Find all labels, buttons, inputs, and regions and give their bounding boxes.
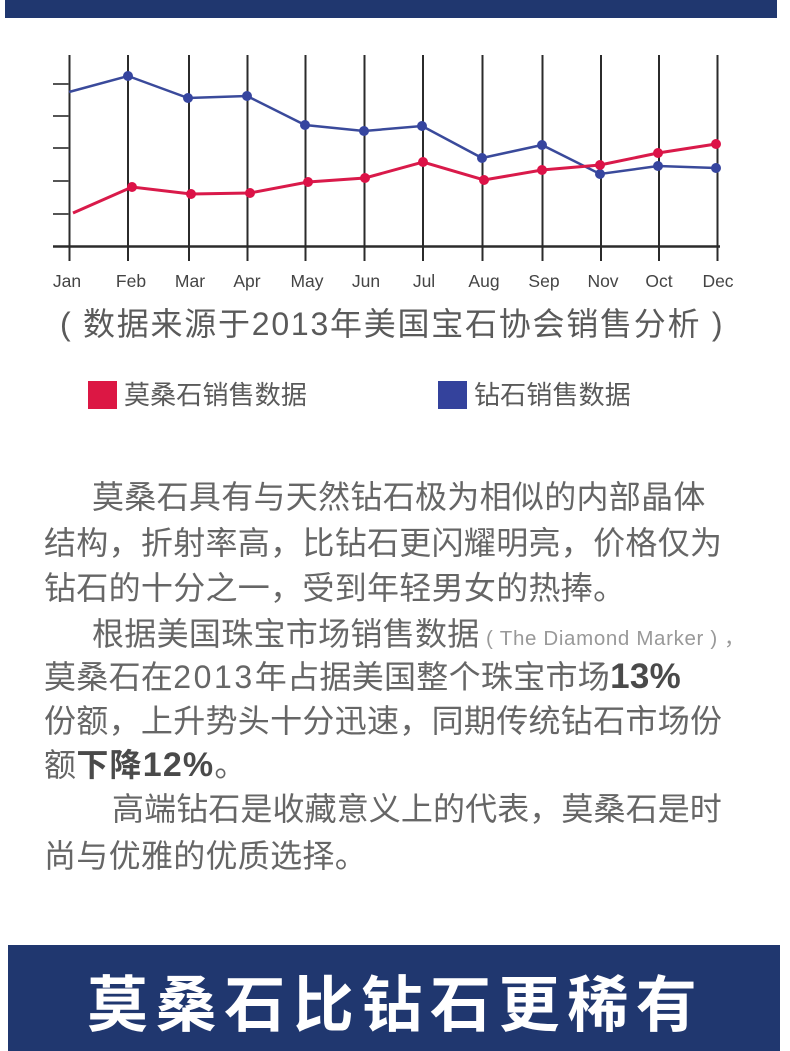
paragraph 1: 结构，折射率高，比钻石更闪耀明亮，价格仅为	[44, 525, 722, 561]
body paragraphs	[44, 479, 745, 874]
diamond sales line	[69, 71, 721, 179]
paragraph 2: 根据美国珠宝市场销售数据 ( The Diamond Marker ) ，	[92, 616, 745, 652]
month labels: May	[290, 271, 324, 291]
month labels	[53, 271, 734, 291]
month labels: Sep	[528, 271, 560, 291]
paragraph 2: 份额，上升势头十分迅速，同期传统钻石市场份	[44, 703, 722, 739]
chart axes and grid	[53, 55, 720, 261]
legend swatch: diamond	[438, 381, 467, 409]
banner title: 莫桑石比钻石更稀有	[87, 971, 704, 1039]
paragraph 3: 高端钻石是收藏意义上的代表，莫桑石是时	[112, 791, 722, 827]
month labels: Dec	[702, 271, 734, 291]
paragraph 3	[44, 791, 722, 874]
month labels: Apr	[233, 271, 261, 291]
month labels: Oct	[645, 271, 673, 291]
line chart: monthly sales	[53, 55, 734, 291]
month labels: Jun	[352, 271, 380, 291]
paragraph 3: 尚与优雅的优质选择。	[44, 838, 367, 874]
paragraph 1: 钻石的十分之一，受到年轻男女的热捧。	[44, 570, 625, 606]
moissanite sales line	[73, 139, 721, 213]
chart source caption: ( 数据来源于2013年美国宝石协会销售分析 )	[60, 306, 724, 342]
month labels: Jan	[53, 271, 81, 291]
month labels: Aug	[468, 271, 500, 291]
legend swatch: moissanite	[88, 381, 117, 409]
paragraph 2: 额下降12%。	[44, 746, 247, 784]
top banner	[5, 0, 777, 18]
legend label: diamond: 钻石销售数据	[474, 380, 631, 410]
month labels: Nov	[587, 271, 619, 291]
month labels: Feb	[116, 271, 146, 291]
legend label: moissanite: 莫桑石销售数据	[124, 380, 307, 410]
paragraph 1	[44, 479, 722, 606]
month labels: Jul	[413, 271, 435, 291]
bottom banner	[8, 945, 780, 1051]
legend	[88, 380, 631, 410]
paragraph 2: 莫桑石在2013年占据美国整个珠宝市场13%	[44, 657, 681, 696]
paragraph 2	[44, 616, 745, 784]
month labels: Mar	[175, 271, 205, 291]
paragraph 1: 莫桑石具有与天然钻石极为相似的内部晶体	[92, 479, 706, 515]
